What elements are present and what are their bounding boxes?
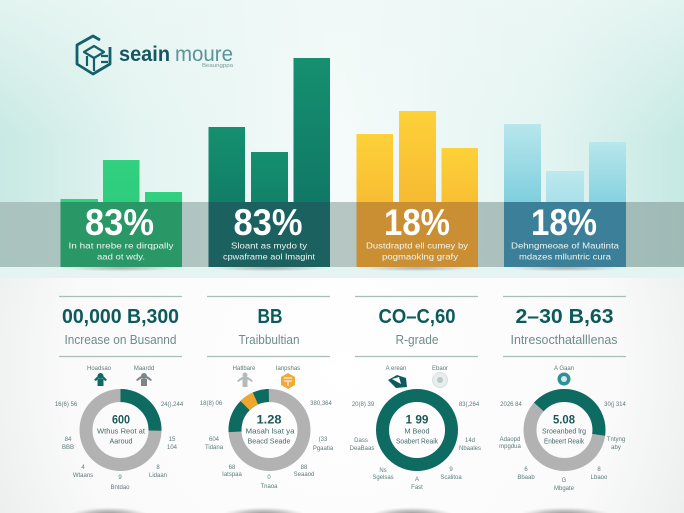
- bar shadows: [61, 264, 625, 272]
- heading block 3: [378, 306, 456, 347]
- donut labels: Tntyng: [607, 437, 625, 443]
- icon: pale circle: [432, 372, 448, 388]
- heading block 3: CO–C,60: [378, 306, 456, 328]
- percentage: 18%: [384, 202, 450, 243]
- donut labels: mpgdua: [499, 444, 522, 450]
- donut chart: [86, 396, 155, 464]
- donut labels: Wthus Reot at: [97, 426, 146, 436]
- donut labels: (33: [319, 437, 328, 443]
- translucent band: [0, 202, 684, 267]
- description: [223, 240, 316, 262]
- logo wordmark: Beaungppa: [202, 63, 233, 69]
- icon: orange hexagon: [281, 373, 295, 389]
- donut labels: 6: [524, 467, 528, 473]
- donut labels: M Beod: [404, 426, 430, 436]
- donut labels: 0: [267, 475, 271, 481]
- donut panel 2: [200, 366, 334, 490]
- donut labels: 8: [156, 465, 160, 471]
- donut labels: A: [415, 477, 419, 483]
- heading block 1: [62, 306, 179, 347]
- donut labels: Enbeert Reaik: [544, 436, 584, 446]
- description: In hat nrebe re dirqpally: [68, 240, 174, 250]
- icon: gray figure: [237, 372, 253, 387]
- chart bars: dark teal: [208, 58, 330, 267]
- donut labels: Ianpshas: [276, 366, 300, 372]
- donut chart: [221, 381, 318, 479]
- donut labels: 4: [81, 465, 85, 471]
- icon: gray figure: [136, 373, 152, 386]
- logo wordmark: [119, 43, 233, 69]
- description: cpwaframe aol Imagint: [223, 252, 316, 262]
- donut labels: Seaaod: [294, 472, 314, 478]
- donut labels: aby: [611, 445, 621, 451]
- donut labels: Mbgate: [554, 486, 575, 492]
- donut labels: 9: [449, 467, 453, 473]
- donut labels: 30(j 314: [604, 402, 627, 408]
- donut labels: Soabert Reaik: [396, 436, 438, 446]
- heading block 2: Traibbultian: [238, 332, 300, 347]
- donut labels: DeaBaas: [350, 446, 374, 452]
- donut labels: Nbaales: [459, 446, 481, 452]
- donut labels: 380,364: [310, 401, 332, 407]
- heading block 2: BB: [258, 306, 282, 328]
- heading block 4: Intresocthatalllenas: [510, 332, 618, 347]
- donut labels: Beacd Seade: [248, 436, 290, 446]
- description: [366, 240, 469, 262]
- donut labels: Sroeanbed lrg: [542, 426, 586, 436]
- icon: teal figure: [94, 373, 107, 386]
- donut labels: Hoadsao: [87, 366, 112, 372]
- percentage: 83%: [234, 202, 302, 243]
- panel: stat 2: [208, 202, 330, 267]
- donut labels: 600: [112, 414, 130, 426]
- donut labels: 83(,264: [459, 402, 480, 408]
- panel: stat 4: [504, 202, 626, 267]
- donut labels: Fast: [411, 485, 423, 491]
- donut labels: 9: [118, 475, 122, 481]
- donut labels: Tidana: [205, 445, 224, 451]
- chart bars: green: [60, 160, 182, 267]
- description: pogmaoklng grafy: [382, 252, 459, 262]
- description: Dehngmeoae of Mautinta: [511, 240, 619, 250]
- donut labels: Iatspaa: [222, 472, 243, 478]
- logo wordmark: moure: [175, 43, 233, 66]
- donut labels: Dass: [354, 438, 368, 444]
- heading block 4: 2–30 B,63: [516, 306, 614, 328]
- donut labels: Sgelsas: [372, 475, 394, 481]
- logo wordmark: seain: [119, 43, 170, 66]
- donut labels: Maardd: [134, 366, 154, 372]
- donut labels: 16(6) 56: [55, 402, 78, 408]
- description: [511, 240, 619, 262]
- donut labels: Hatlbare: [233, 366, 256, 372]
- donut labels: Tnaoa: [260, 484, 278, 490]
- donut labels: 1.28: [256, 414, 282, 426]
- donut labels: 1 99: [406, 414, 428, 426]
- description: mdazes mlluntric cura: [519, 252, 611, 262]
- donut labels: Scalitoa: [440, 475, 462, 481]
- donut labels: Lidaan: [149, 473, 167, 479]
- donut labels: [55, 366, 184, 491]
- donut labels: [350, 366, 481, 491]
- chart bars: blue: [504, 124, 626, 267]
- donut labels: 88: [301, 465, 308, 471]
- donut labels: 104: [167, 445, 178, 451]
- donut labels: Wtaans: [73, 473, 93, 479]
- donut labels: Bbaab: [517, 475, 535, 481]
- description: Dustdraptd ell cumey by: [366, 240, 469, 250]
- donut labels: 20(8) 39: [352, 402, 375, 408]
- dividers: [59, 296, 626, 356]
- heading block 1: Increase on Busannd: [64, 332, 176, 347]
- donut labels: Masah lsat ya: [246, 426, 295, 436]
- donut labels: [499, 366, 627, 492]
- donut chart: [382, 396, 452, 464]
- donut labels: Ns: [379, 468, 387, 474]
- donut labels: BBB: [62, 445, 74, 451]
- chart bars: amber: [356, 111, 478, 267]
- donut labels: A Gaan: [554, 366, 574, 372]
- icon: teal badge: [558, 372, 570, 386]
- heading block 2: [238, 306, 300, 347]
- donut panel 1: [55, 366, 184, 491]
- donut labels: Pgaatia: [313, 446, 334, 452]
- panel: stat 3: [356, 202, 478, 267]
- donut panel 3: [350, 366, 481, 491]
- donut labels: 14d: [465, 438, 475, 444]
- donut labels: A erean: [386, 366, 406, 372]
- donut labels: 8: [597, 467, 601, 473]
- donut labels: Adaopd: [500, 437, 520, 443]
- donut labels: 68: [229, 465, 236, 471]
- description: [68, 240, 174, 262]
- donut chart: [516, 381, 613, 479]
- donut labels: G: [562, 478, 567, 484]
- donut labels: 18(8) 06: [200, 401, 223, 407]
- donut labels: 15: [169, 437, 176, 443]
- donut labels: Aaroud: [110, 436, 132, 446]
- description: Sloant as mydo ty: [231, 240, 308, 250]
- donut labels: 5.08: [553, 414, 576, 426]
- heading block 1: 00,000 B,300: [62, 306, 179, 328]
- bottom shadows: [69, 507, 611, 513]
- donut labels: Ebaor: [432, 366, 448, 372]
- icon: diamond tag: [388, 375, 407, 388]
- heading block 4: [510, 306, 618, 347]
- logo: [77, 36, 233, 74]
- donut labels: 2026 84: [500, 402, 522, 408]
- percentage: 83%: [85, 202, 154, 243]
- icon: hexagon logo mark: [77, 36, 110, 74]
- donut panel 4: [499, 366, 627, 492]
- percentage: 18%: [531, 202, 597, 243]
- donut labels: Bntdao: [110, 485, 130, 491]
- donut labels: 84: [65, 437, 72, 443]
- donut labels: Lbaoo: [591, 475, 608, 481]
- donut labels: 604: [209, 437, 220, 443]
- donut labels: [200, 366, 334, 490]
- description: aad ot wdy.: [97, 252, 145, 262]
- donut labels: 24(),244: [161, 402, 184, 408]
- heading block 3: R-grade: [396, 332, 438, 347]
- panel: stat 1: [60, 202, 182, 267]
